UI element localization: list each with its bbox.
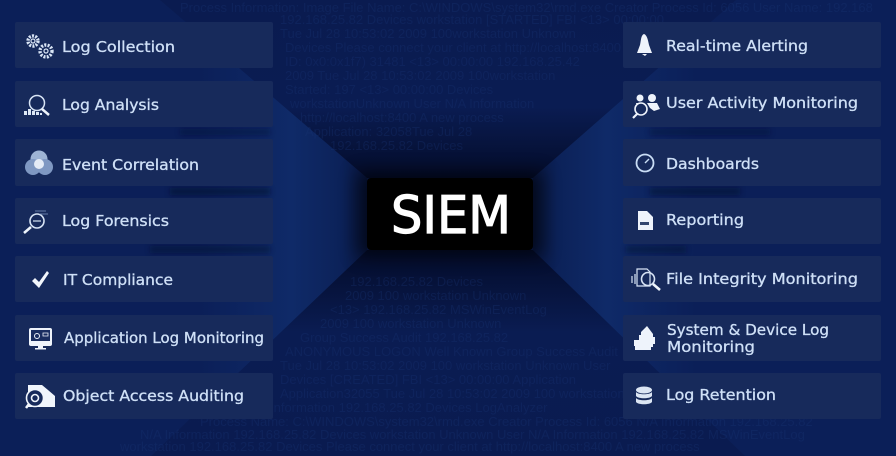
faint log text background: Application: 32058Tue Jul 28 [305, 124, 472, 139]
item: Reporting: Reporting [666, 211, 744, 229]
icon: document [638, 211, 653, 230]
item: Log Collection: Log Collection [62, 38, 175, 56]
item: Log Analysis [15, 81, 273, 127]
item: File Integrity Monitoring: File Integrity Monitoring [666, 270, 858, 288]
item: User Activity Monitoring [623, 81, 881, 127]
panel: left capabilities column [15, 22, 273, 419]
icon: check mark [32, 271, 49, 288]
item: Application Log Monitoring [15, 315, 273, 361]
item: Dashboards: Dashboards [666, 155, 759, 173]
item: Dashboards [623, 139, 881, 186]
item: Log Forensics: Log Forensics [62, 212, 169, 230]
faint log text background: Process Information: Image File Name: C:\WINDOWS\system32\rmd.exe Creator Process Id: 6056 User Name: 192.168 [180, 0, 873, 15]
faint log text background: workstation 192.168.25.82 Devices Please connect your client at http://localhost:8400 A new process [119, 439, 700, 454]
faint log text background: Information 192.168.25.82 Devices LogAnalyzer [270, 400, 548, 415]
faint log text background: Tue Jul 28 10:53:02 2009 100workstation Unknown [280, 26, 576, 41]
panel: SIEM centre box: SIEM [391, 186, 511, 246]
icon: forensic magnifier [24, 211, 48, 233]
icon: file and magnifier [632, 269, 660, 290]
text: two-line label [667, 321, 829, 356]
faint log text background: 2009 100 workstation Unknown [320, 316, 501, 331]
item: Log Collection [15, 22, 273, 68]
faint log text background: workstationUnknown User N/A Information [289, 96, 534, 111]
item: User Activity Monitoring: User Activity Monitoring [666, 94, 858, 112]
item: System & Device Log Monitoring [623, 315, 881, 361]
item: Event Correlation: Event Correlation [62, 156, 199, 174]
item: Log Retention: Log Retention [666, 386, 776, 404]
faint log text background: ID: 0x0:0x1f7) 31481 <13> 00:00:00 192.168.25.42 [285, 54, 580, 69]
item: IT Compliance [15, 256, 273, 302]
faint log text background: Application32055 Tue Jul 28 10:53:02 2009 100 workstation [280, 386, 625, 401]
item: Reporting [623, 198, 881, 244]
faint log text background: Started: 197 <13> 00:00:00 Devices [285, 82, 494, 97]
faint log text background: 192.168.25.82 Devices workstation [STARTED] FBI <13> 00:00:00 [280, 12, 664, 27]
faint log text background: Process Name: C:\WINDOWS\system32\rmd.exe Creator Process Id: 6056 N/A Information 192.168.25.82 [200, 414, 813, 429]
faint log text background: 2009 Tue Jul 28 10:53:02 2009 100workstation [285, 68, 555, 83]
panel: SIEM centre box [357, 172, 543, 256]
icon: gauge [636, 154, 654, 172]
faint log text background: http://localhost:8400 A new process [300, 110, 504, 125]
faint log text background: Tue Jul 28 10:53:02 2009 100 workstation Unknown User [280, 358, 611, 373]
item: Object Access Auditing [15, 373, 273, 419]
icon: magnifier over bars [24, 96, 49, 115]
faint log text background: N/A Information 192.168.25.82 Devices workstation Unknown User N/A Information 192.168.25.82 MSWinEventLog [140, 427, 805, 442]
faint log text background: ANONYMOUS LOGON Well Known Group Success Audit [285, 344, 618, 359]
item: IT Compliance: IT Compliance [63, 271, 173, 289]
faint log text background: Devices [CREATED] FBI <13> 00:00:00 Application [280, 372, 576, 387]
faint log text background: Group Success Audit 192.168.25.82 [300, 330, 508, 345]
panel: right capabilities column [623, 22, 881, 419]
icon: monitor [29, 328, 52, 350]
icon: file and lens [26, 385, 55, 408]
item: Event Correlation [15, 139, 273, 186]
item: Log Retention [623, 373, 881, 419]
icon: system stack [634, 326, 655, 350]
item: Application Log Monitoring: Application Log Monitoring [64, 329, 264, 347]
faint log text background: <13> 192.168.25.82 MSWinEventLog [330, 302, 547, 317]
item: Real-time Alerting: Real-time Alerting [666, 37, 808, 55]
item: Object Access Auditing: Object Access Auditing [63, 387, 244, 405]
item: Log Analysis: Log Analysis [62, 96, 159, 114]
faint log text background: 192.168.25.82 Devices [330, 138, 463, 153]
text: two-line label: System & Device Log [667, 321, 829, 339]
faint log text background: Devices Please connect your client at http://localhost:8400 [285, 40, 621, 55]
icon: users with lens [633, 94, 660, 118]
item: File Integrity Monitoring [623, 256, 881, 302]
icon: overlapping circles [25, 150, 53, 175]
icon: database [636, 386, 652, 404]
faint log text background: 192.168.25.82 Devices [350, 274, 483, 289]
icon: gears [28, 36, 52, 57]
item: Real-time Alerting [623, 22, 881, 68]
item: Log Forensics [15, 198, 273, 244]
faint log text background: 2009 100 workstation Unknown [345, 288, 526, 303]
text: two-line label: Monitoring [667, 338, 755, 356]
icon: bell [637, 34, 652, 56]
